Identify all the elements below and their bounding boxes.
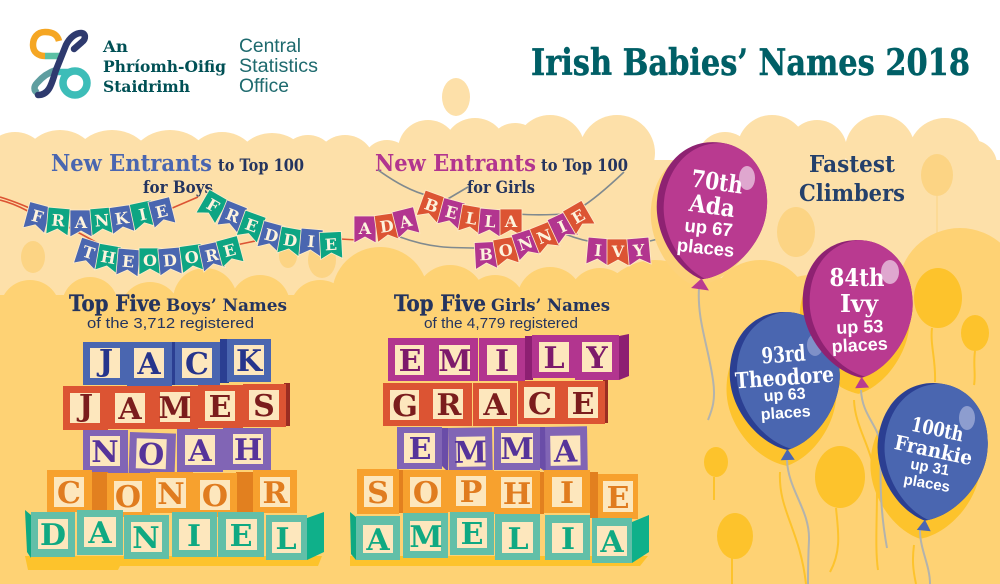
bunting: IVY: Y [631, 240, 646, 261]
balloon: Theodore: Theodore [734, 362, 835, 394]
background: pale balloons [21, 154, 953, 278]
blocks: EMMA [397, 426, 588, 472]
organisation name: English [239, 36, 318, 97]
heading: new entrants boys: New Entrants [51, 150, 212, 177]
balloon: Ada: Ada [686, 188, 737, 223]
bunting: FRANKIE: A [74, 213, 88, 232]
blocks: EMMA: M [500, 432, 534, 467]
blocks: GRACE [383, 380, 608, 426]
organisation name: Irish [102, 37, 226, 96]
background yellow balloons [704, 268, 989, 559]
blocks: NOAH: O [138, 437, 165, 473]
heading: fastest climbers: Climbers [799, 180, 905, 207]
balloon shadows [641, 142, 985, 543]
bunting: IVY [586, 237, 651, 266]
bunting: FRANKIE: E [153, 201, 170, 222]
bunting strings [0, 170, 662, 250]
heading: top five boys: Top Five [69, 291, 161, 317]
bunting: FREDDIE: E [243, 215, 260, 237]
blocks: JACK: A [136, 347, 161, 382]
bunting: BONNIE: E [568, 205, 588, 228]
blocks: GRACE: R [437, 388, 463, 423]
blocks: GRACE: G [392, 389, 418, 424]
blocks: SOPHIE [357, 469, 638, 519]
bunting: THEODORE: H [99, 247, 117, 268]
heading: top five boys: Boys’ Names [166, 296, 287, 316]
balloon: Frankie: Frankie [892, 430, 975, 470]
blocks: EMILY: I [495, 344, 509, 379]
blocks: JAMES: S [253, 389, 275, 424]
bunting: ADA: A [396, 211, 415, 233]
blocks: SOPHIE: I [560, 476, 574, 511]
bunting: BONNIE: B [479, 245, 493, 264]
blocks: AMELIA: I [561, 522, 575, 557]
heading: top five boys [69, 291, 287, 332]
bunting: THEODORE: O [184, 247, 200, 268]
blocks: SOPHIE: H [503, 477, 531, 512]
heading: new entrants boys [51, 150, 304, 198]
balloon: Theodore: 93rd [761, 341, 806, 370]
organisation name: Irish: An [102, 37, 128, 56]
balloon strings [699, 288, 930, 584]
blocks: SOPHIE: P [460, 475, 482, 510]
balloon: Ivy: Ivy [840, 289, 879, 318]
blocks: AMELIA: L [507, 522, 529, 557]
bunting: ADA [354, 207, 420, 243]
blocks: JAMES [63, 383, 290, 430]
balloon: Frankie: 100th [909, 412, 966, 446]
heading: fastest climbers [799, 151, 905, 207]
blocks: AMELIA: A [365, 523, 390, 558]
organisation name: English: Central [239, 36, 301, 57]
blocks: DANIEL: L [275, 522, 297, 557]
bunting: FREDDIE: E [324, 235, 338, 254]
blocks: JAMES: A [117, 392, 142, 427]
heading: top five girls: of the 4,779 registered [424, 316, 578, 332]
bunting: THEODORE: O [143, 251, 157, 270]
balloon: Ivy: 84th [830, 263, 884, 292]
balloon: Theodore [730, 312, 840, 460]
bunting: BONNIE: N [516, 232, 535, 255]
organisation name: English: Statistics [239, 56, 318, 77]
blocks: CONOR [47, 470, 297, 517]
bunting: BELLA: E [443, 202, 460, 223]
heading: top five boys: of the 3,712 registered [87, 316, 254, 332]
balloon: Ada: 70th [689, 164, 745, 200]
heading: new entrants boys: to Top 100 [218, 156, 304, 176]
balloon: Ivy [802, 240, 913, 388]
blocks: CONOR: C [57, 476, 81, 511]
organisation name: Irish: Staidrimh [103, 77, 190, 96]
blocks: JACK: C [185, 347, 209, 382]
blocks: CONOR: O [202, 479, 228, 514]
blocks: EMILY: Y [585, 341, 608, 376]
bunting: THEODORE: R [203, 245, 221, 266]
balloon: Frankie: up 31 [909, 456, 951, 479]
bunting: ADA: D [379, 216, 395, 237]
balloon: Ada [656, 142, 768, 290]
blocks: NOAH [83, 428, 271, 477]
blocks: AMELIA: A [599, 525, 624, 560]
bunting: FREDDIE: I [307, 232, 316, 251]
heading: top five girls [394, 291, 610, 332]
blocks: EMILY: L [543, 341, 565, 376]
bunting: FRANKIE: K [114, 208, 131, 229]
blocks: NOAH: N [91, 435, 119, 470]
bunting: BELLA: B [422, 194, 441, 217]
blocks: CONOR: R [263, 476, 289, 511]
blocks: SOPHIE: O [413, 476, 439, 511]
blocks: JAMES: J [76, 389, 93, 424]
heading: new entrants girls [375, 150, 628, 198]
bunting: BONNIE [474, 200, 595, 270]
bunting: FREDDIE: F [203, 195, 223, 217]
heading: new entrants girls: to Top 100 [541, 156, 628, 176]
bunting: FREDDIE: R [223, 204, 243, 227]
blocks: DANIEL: I [187, 519, 201, 554]
balloon: Ivy: places [831, 334, 888, 356]
bunting: BELLA: A [504, 212, 518, 231]
logo [33, 32, 87, 95]
blocks: JACK: K [236, 344, 263, 379]
bunting: BONNIE: N [534, 225, 555, 248]
heading: new entrants girls: for Girls [467, 178, 535, 198]
bunting: FRANKIE: R [51, 210, 66, 231]
bunting: BONNIE: O [497, 240, 514, 261]
blocks: SOPHIE: E [607, 481, 629, 516]
blocks: GRACE: A [482, 388, 507, 423]
bunting: BONNIE: I [555, 216, 570, 237]
bunting: FRANKIE: F [29, 206, 46, 227]
blocks: JAMES: M [158, 391, 192, 426]
blocks: CONOR: N [157, 477, 185, 512]
bunting: FREDDIE: D [282, 230, 299, 251]
organisation name: English: Office [239, 76, 289, 97]
blocks: EMILY: E [399, 344, 421, 379]
bunting: THEODORE: T [80, 242, 97, 263]
bunting: FREDDIE [196, 189, 343, 260]
bunting: THEODORE: E [121, 252, 135, 272]
balloon: Frankie [878, 383, 988, 532]
blocks: JAMES: E [209, 390, 231, 425]
blocks: GRACE: E [572, 387, 594, 422]
bunting: BELLA: L [484, 212, 497, 231]
blocks: NOAH: A [187, 434, 212, 469]
blocks: JACK [83, 339, 271, 386]
heading: fastest climbers: Fastest [809, 151, 895, 178]
balloon: Frankie: places [902, 471, 951, 496]
bunting: BELLA: L [464, 208, 478, 229]
heading: top five girls: Top Five [394, 291, 486, 317]
blocks: DANIEL: N [132, 521, 160, 556]
blocks: DANIEL [25, 510, 324, 560]
heading: new entrants boys: for Boys [143, 178, 213, 198]
blocks: CONOR: O [115, 480, 141, 515]
blocks: GRACE: C [528, 387, 552, 422]
blocks: EMMA: M [454, 435, 487, 471]
balloon: Theodore: up 63 [763, 386, 806, 405]
bunting: THEODORE: E [221, 240, 238, 261]
blocks: JACK: J [96, 344, 113, 379]
blocks: EMMA: E [409, 432, 431, 467]
bunting: THEODORE [74, 236, 244, 277]
blocks: DANIEL: D [40, 518, 66, 553]
bunting: FREDDIE: D [262, 225, 281, 247]
organisation name: Irish: Phríomh-Oifig [103, 57, 226, 76]
background: darker cloud band [0, 228, 1000, 584]
blocks: EMMA: A [552, 434, 578, 470]
heading: new entrants girls: New Entrants [375, 150, 536, 177]
balloon: Ada: up 67 [684, 215, 734, 241]
bunting: BELLA [416, 190, 522, 237]
blocks: NOAH: H [234, 433, 262, 468]
balloon: Ada: places [676, 234, 735, 261]
blocks: EMILY [388, 334, 629, 381]
bunting: FRANKIE: I [137, 204, 148, 225]
heading: top five girls: Girls’ Names [491, 296, 610, 316]
blocks: EMILY: M [438, 344, 472, 379]
bunting: IVY: I [594, 241, 603, 260]
blocks: DANIEL: E [230, 519, 252, 554]
blocks: DANIEL: A [87, 516, 112, 551]
blocks: AMELIA: E [461, 517, 483, 552]
blocks shadow [25, 556, 648, 570]
bunting: FRANKIE: N [94, 210, 110, 231]
bunting: IVY: V [611, 242, 625, 261]
blocks: AMELIA [350, 512, 649, 563]
blocks: AMELIA: M [409, 520, 443, 555]
bunting: ADA: A [358, 219, 372, 238]
balloon: Theodore: places [760, 403, 811, 424]
blocks: SOPHIE: S [367, 476, 389, 511]
balloon: Ivy: up 53 [836, 316, 884, 338]
bunting: FRANKIE [23, 197, 176, 237]
bunting: THEODORE: D [162, 250, 178, 271]
